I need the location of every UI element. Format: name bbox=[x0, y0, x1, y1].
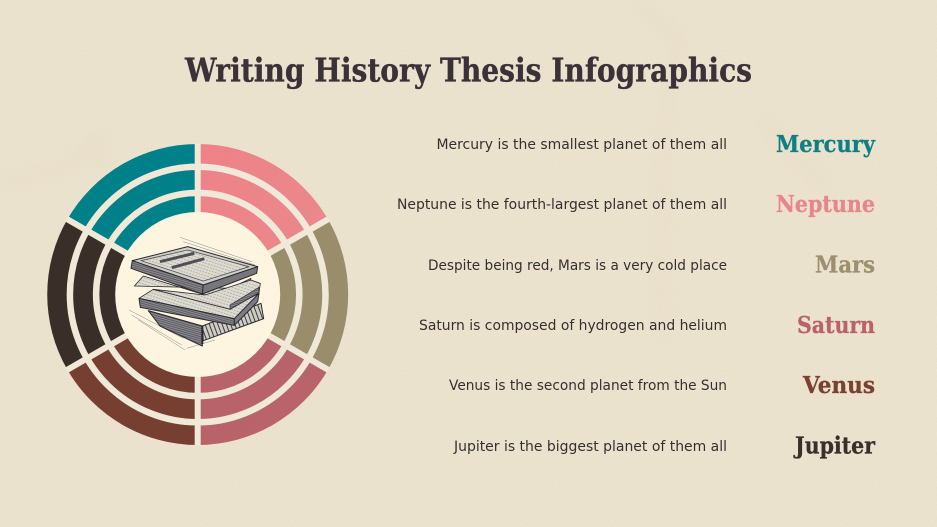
row: Mars bbox=[428, 250, 875, 278]
name: Mercury: Mercury bbox=[776, 130, 876, 158]
name: Venus: Venus bbox=[802, 371, 875, 399]
name: Jupiter: Jupiter bbox=[793, 432, 876, 460]
row: Neptune bbox=[397, 190, 875, 218]
donut chart bbox=[47, 144, 348, 446]
row: Venus bbox=[449, 371, 875, 399]
description: Mars: Despite being red, Mars is a very cold place bbox=[428, 258, 727, 274]
description: Neptune: Neptune is the fourth-largest planet of them all bbox=[397, 197, 727, 213]
row: Jupiter bbox=[453, 432, 876, 460]
name: Neptune: Neptune bbox=[776, 190, 875, 218]
segment: Venus bbox=[67, 294, 198, 445]
name: Mars: Mars bbox=[815, 250, 875, 278]
top book bbox=[131, 237, 258, 294]
row: Saturn bbox=[419, 311, 875, 339]
segment: Neptune bbox=[198, 144, 328, 294]
description: Mercury: Mercury is the smallest planet of them all bbox=[436, 137, 727, 153]
row: Mercury bbox=[436, 130, 876, 158]
second sheet bbox=[134, 276, 260, 309]
description: Saturn: Saturn is composed of hydrogen and helium bbox=[419, 318, 727, 334]
segment: Saturn bbox=[198, 294, 328, 445]
description: Jupiter: Jupiter is the biggest planet of them all bbox=[453, 439, 727, 455]
segment: Mars bbox=[198, 219, 348, 370]
icon: stack of books bbox=[129, 237, 264, 350]
segment: Mercury bbox=[67, 144, 198, 294]
center circle bbox=[115, 212, 280, 377]
bottom book bbox=[129, 303, 264, 350]
description: Venus: Venus is the second planet from the Sun bbox=[449, 378, 727, 394]
name: Saturn: Saturn bbox=[797, 311, 875, 339]
title: Writing History Thesis Infographics bbox=[184, 50, 752, 90]
third book bbox=[139, 289, 259, 325]
segment: Jupiter bbox=[47, 219, 198, 370]
